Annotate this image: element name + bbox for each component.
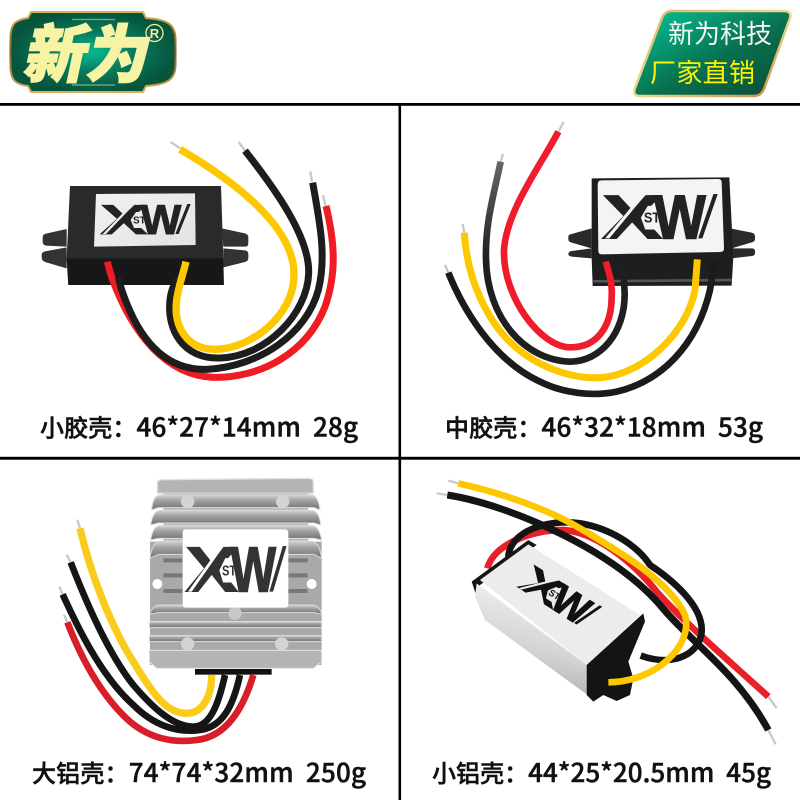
brand mark: X bbox=[185, 535, 238, 606]
brand logo badge: 新为 bbox=[18, 5, 161, 96]
brand mark: W bbox=[141, 196, 182, 243]
factory direct badge: 厂家直销 bbox=[650, 53, 755, 90]
caption: small aluminium: 小铝壳：44*25*20.5mm 45g bbox=[432, 753, 771, 790]
brand mark: W bbox=[542, 578, 599, 633]
caption: medium plastic: 中胶壳：46*32*18mm 53g bbox=[445, 408, 763, 444]
wires bbox=[59, 520, 253, 741]
panel: small plastic case bbox=[42, 142, 333, 377]
rear wires bbox=[437, 481, 777, 744]
front yellow wire bbox=[458, 483, 686, 682]
panel: medium plastic case bbox=[445, 122, 755, 394]
brand mark bbox=[511, 558, 606, 638]
brand logo badge: R bbox=[150, 26, 160, 41]
brand mark bbox=[185, 534, 287, 606]
brand mark: ST bbox=[547, 588, 563, 602]
brand mark: W bbox=[231, 534, 276, 605]
factory direct badge bbox=[634, 11, 790, 96]
brand mark: X bbox=[602, 182, 663, 252]
brand mark: W bbox=[654, 183, 706, 252]
brand mark: ST bbox=[133, 215, 146, 226]
brand mark: X bbox=[512, 558, 574, 617]
factory direct badge: 新为科技 bbox=[668, 14, 772, 51]
brand mark bbox=[602, 182, 718, 252]
case body with flanges bbox=[42, 186, 248, 285]
caption: large aluminium: 大铝壳：74*74*32mm 250g bbox=[32, 753, 366, 790]
panel: large aluminium case bbox=[59, 478, 322, 741]
panel: small aluminium case bbox=[437, 481, 777, 744]
case body with flanges bbox=[568, 177, 755, 286]
brand mark bbox=[100, 196, 191, 243]
brand mark: ST bbox=[644, 209, 661, 226]
wires bbox=[107, 142, 333, 377]
wires bbox=[445, 122, 715, 394]
aluminium body bbox=[472, 540, 645, 702]
brand mark: ST bbox=[222, 562, 236, 579]
brand mark: X bbox=[100, 197, 148, 243]
caption: small plastic: 小胶壳：46*27*14mm 28g bbox=[40, 408, 358, 444]
aluminium heat sink bbox=[149, 478, 322, 675]
